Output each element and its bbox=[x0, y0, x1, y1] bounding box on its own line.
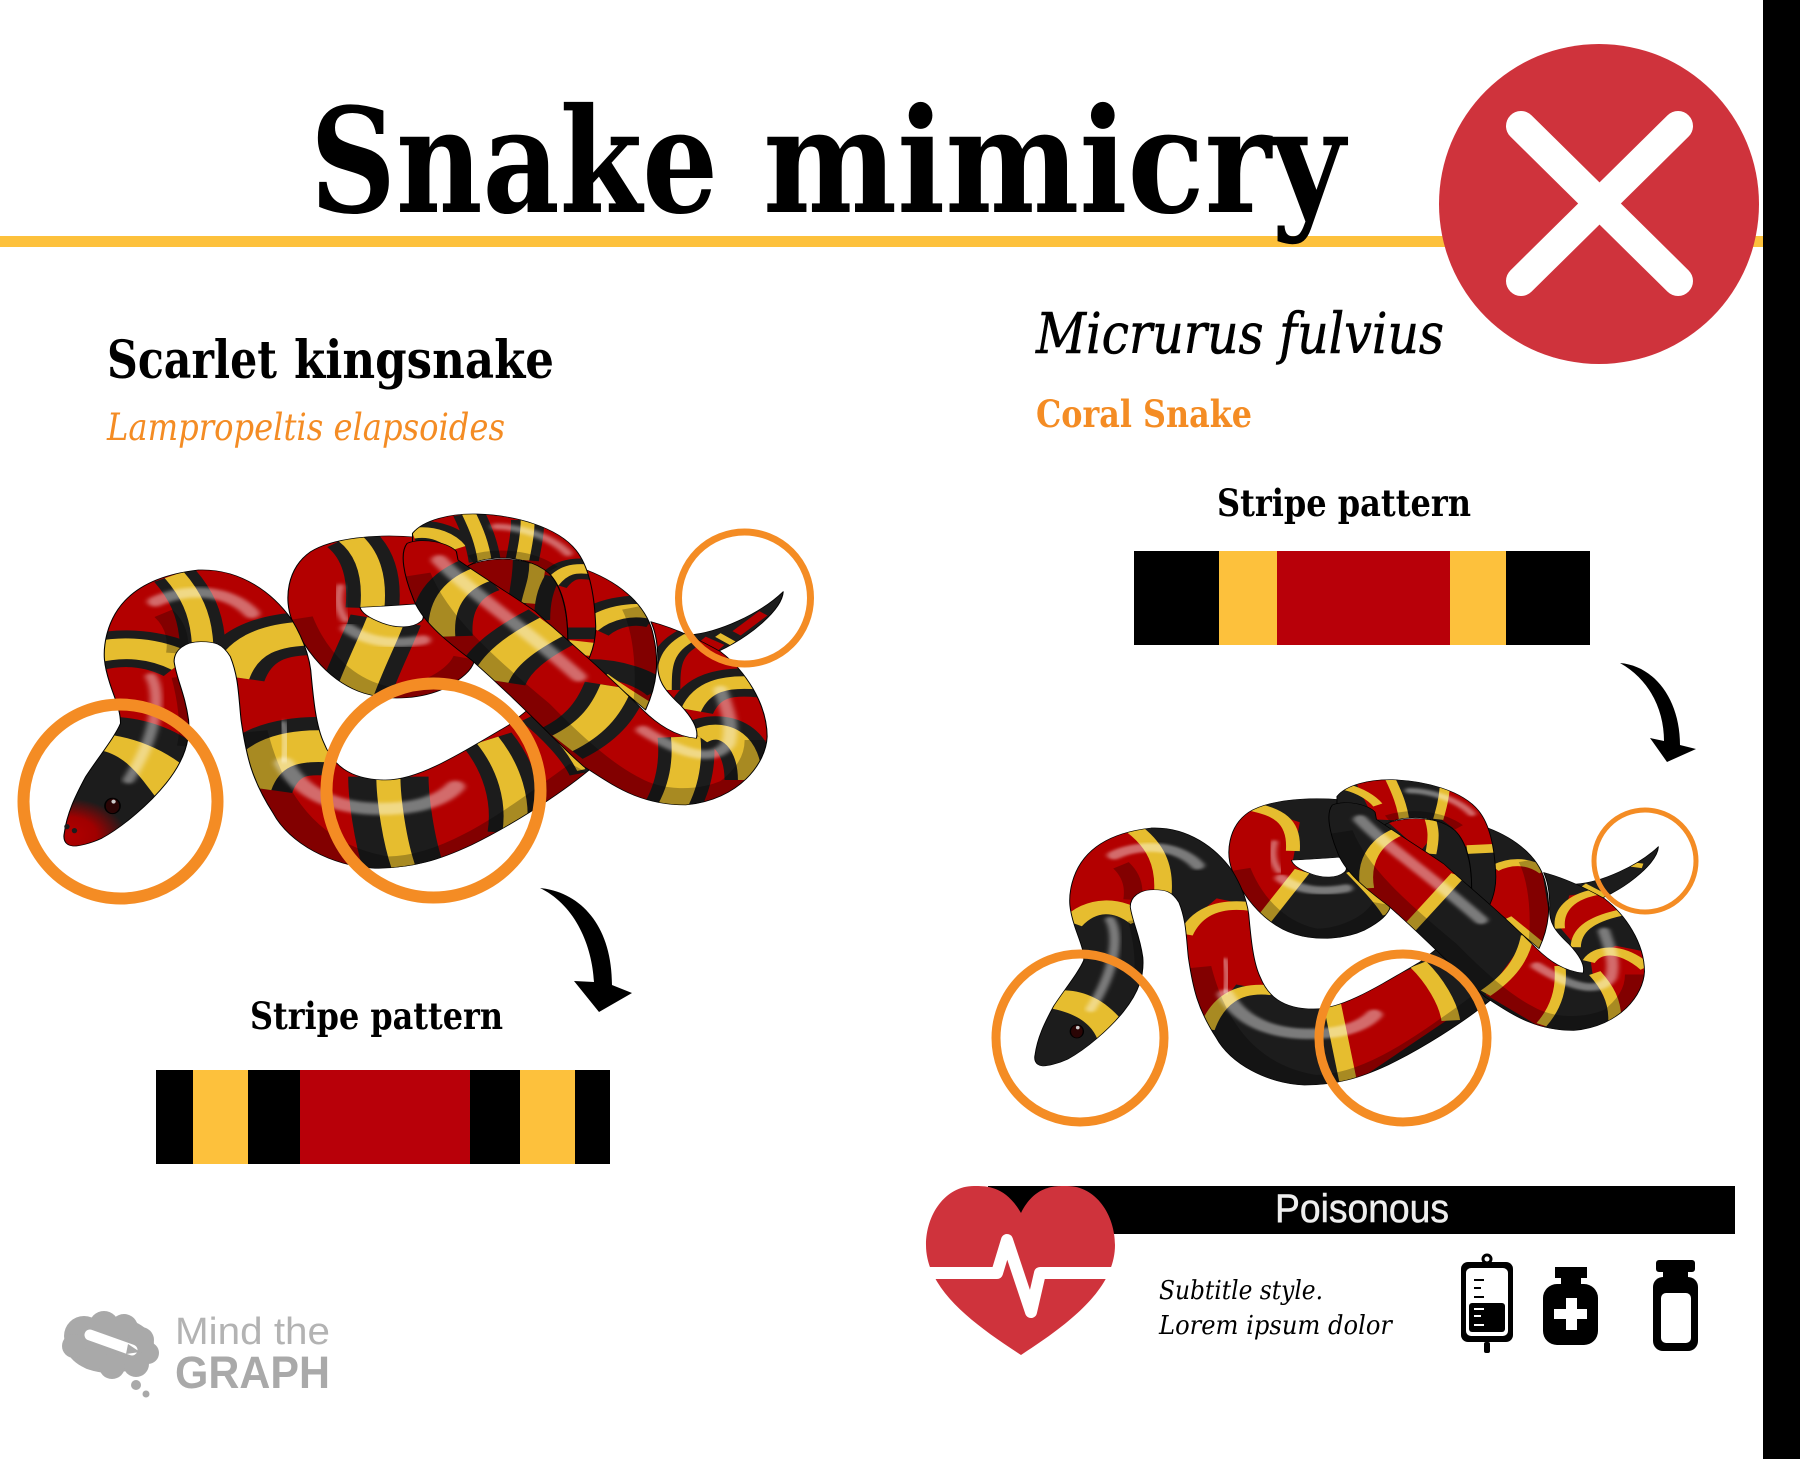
icon: heart with pulse line bbox=[922, 1186, 1119, 1355]
icon: medicine bottle with plus bbox=[1543, 1267, 1598, 1345]
subheading: Coral Snake: Coral Snake bbox=[1036, 392, 1252, 436]
callouts: orange rings on coral snake bbox=[996, 810, 1696, 1122]
arrow: stripe pattern to coral snake bbox=[1620, 663, 1696, 762]
text block: subtitle: Subtitle style. bbox=[1159, 1276, 1323, 1306]
text block: subtitle bbox=[1158, 1276, 1393, 1341]
illustration: scarlet kingsnake bbox=[54, 513, 783, 877]
logo: Mind the Graph: Mind the bbox=[175, 1311, 330, 1353]
poisonous header bar: Poisonous bbox=[1275, 1187, 1449, 1231]
icon: vial bbox=[1653, 1260, 1698, 1351]
yellow title rule bbox=[0, 236, 1763, 247]
heading: Scarlet kingsnake: Scarlet bbox=[107, 330, 277, 391]
label: stripe pattern right: Stripe pattern bbox=[1217, 481, 1471, 525]
subheading: Lampropeltis elapsoides: Lampropeltis elapsoides bbox=[106, 406, 505, 449]
arrow: snake to stripe pattern bbox=[540, 888, 632, 1012]
icon: IV bag bbox=[1461, 1255, 1513, 1353]
label: stripe pattern left: Stripe pattern bbox=[250, 994, 503, 1038]
illustration: coral snake bbox=[1035, 778, 1658, 1092]
callouts: orange rings on scarlet kingsnake bbox=[24, 532, 810, 898]
title bbox=[310, 77, 1348, 247]
logo: Mind the Graph bbox=[62, 1311, 330, 1398]
stripe pattern bar: coral snake bbox=[1134, 551, 1590, 645]
heading: Scarlet kingsnake: kingsnake bbox=[294, 330, 554, 391]
stripe pattern bar: kingsnake bbox=[156, 1070, 610, 1164]
heading: Micrurus fulvius: Micrurus fulvius bbox=[1035, 302, 1444, 367]
right edge black strip bbox=[1763, 0, 1800, 1459]
heading: Scarlet kingsnake bbox=[107, 330, 554, 391]
logo: Mind the Graph: GRAPH bbox=[175, 1347, 330, 1398]
title: Snake bbox=[310, 77, 718, 247]
title: mimicry bbox=[763, 77, 1348, 247]
poisonous header bar bbox=[988, 1186, 1735, 1234]
text block: subtitle: Lorem ipsum dolor bbox=[1158, 1311, 1393, 1341]
icon: red circle with white cross bbox=[1439, 44, 1759, 364]
